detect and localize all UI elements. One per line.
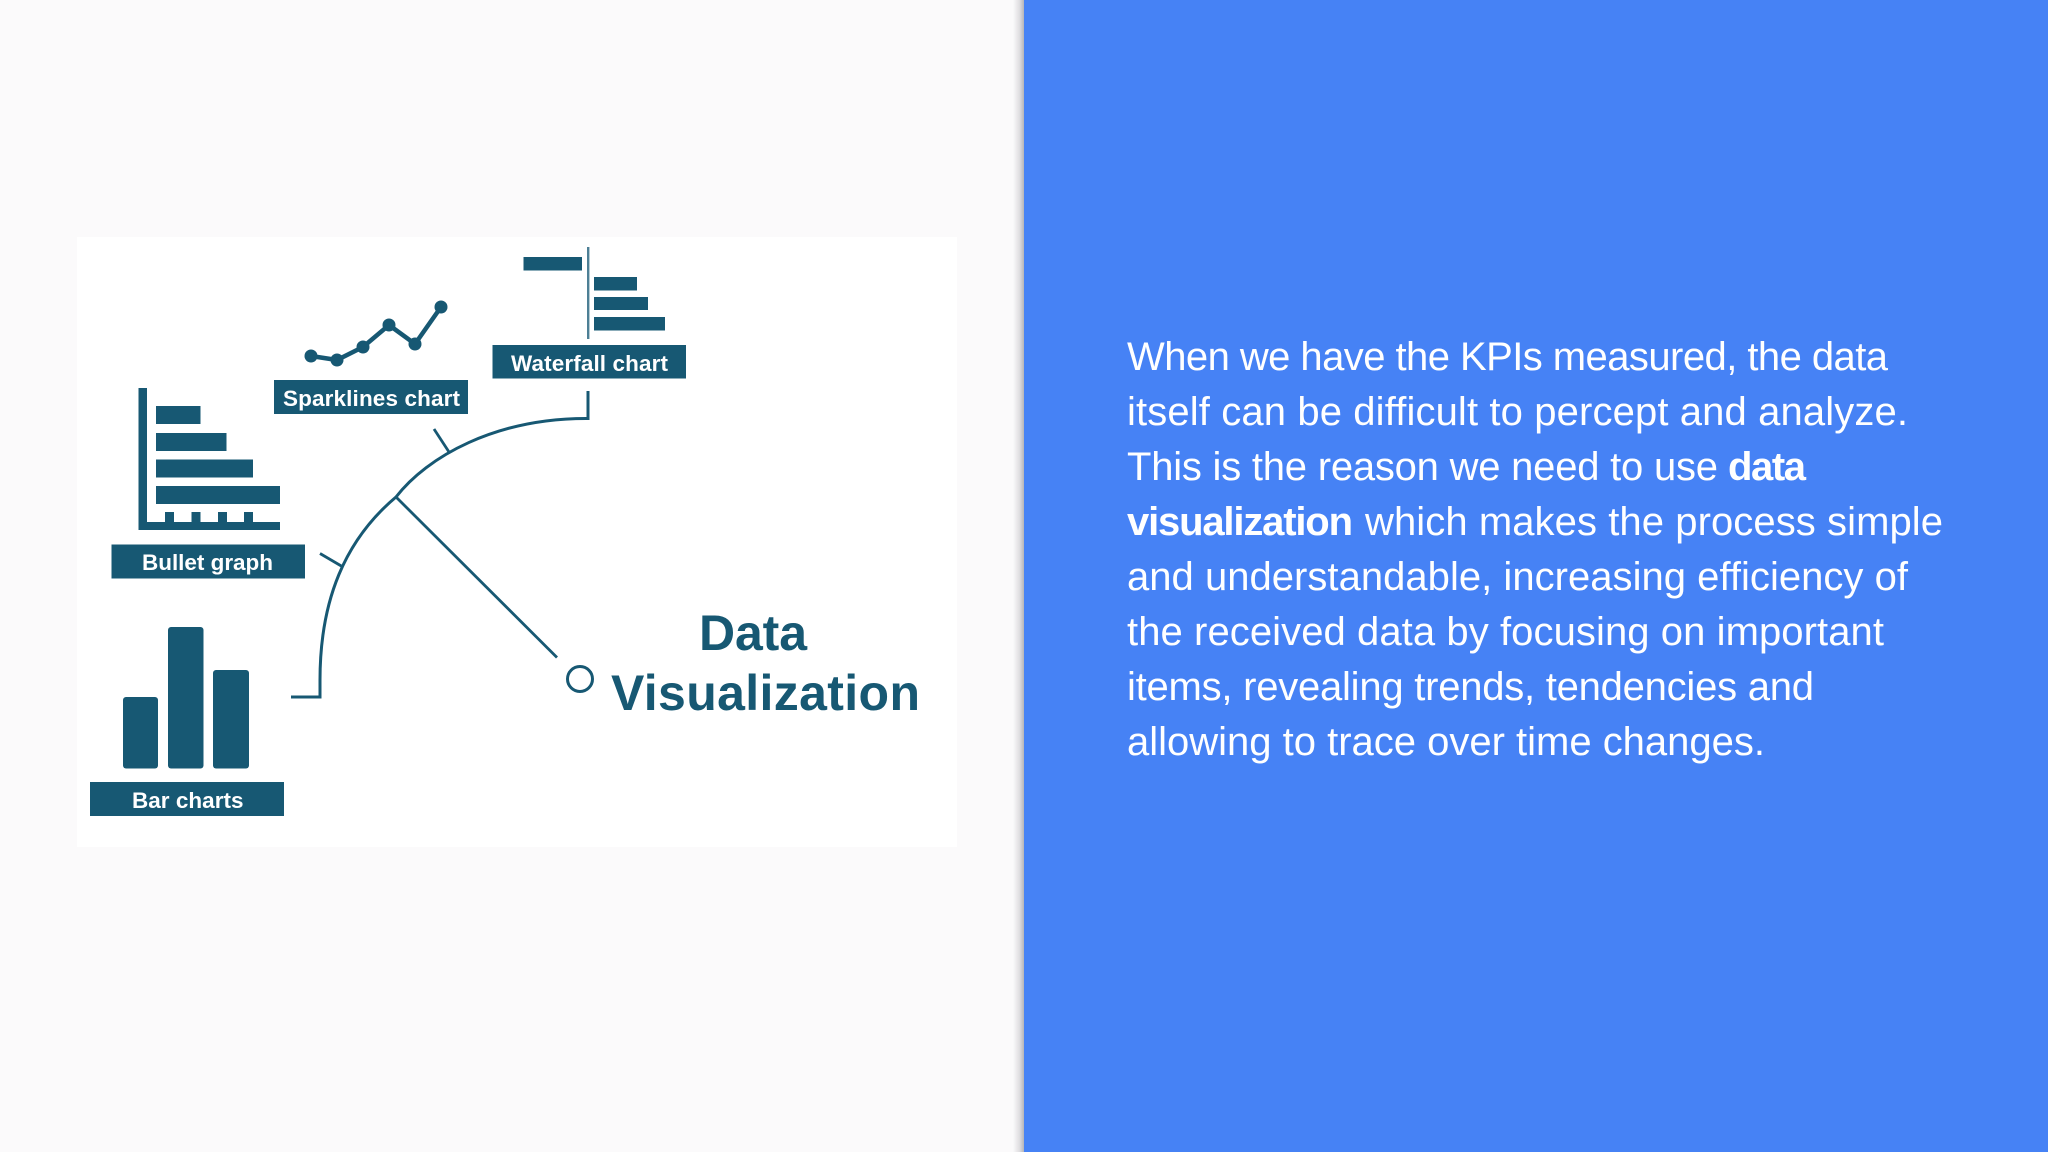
- label: bar charts: Bar charts: [132, 788, 244, 813]
- label: sparklines chart: [274, 380, 468, 414]
- text block: data visualization explanation: the received data by focusing on important: [1127, 610, 1884, 654]
- text block: data visualization explanation: [1127, 335, 1943, 764]
- panel: data visualization diagram: [77, 237, 957, 847]
- text block: data visualization explanation: allowing to trace over time changes.: [1127, 720, 1765, 764]
- text block: data visualization explanation: visualization: [1127, 500, 1353, 544]
- label: bullet graph: Bullet graph: [142, 550, 273, 575]
- label: bar charts: [90, 782, 284, 816]
- text block: data visualization explanation: and understandable, increasing efficiency of: [1127, 555, 1909, 599]
- icon: hub circle: [568, 666, 592, 692]
- label: sparklines chart: Sparklines chart: [283, 386, 460, 411]
- icon: waterfall chart: [524, 247, 665, 339]
- text block: data visualization explanation: When we have the KPIs measured, the data: [1127, 335, 1889, 379]
- label: bullet graph: [112, 544, 305, 578]
- heading: data visualization: Visualization: [611, 665, 920, 721]
- text block: data visualization explanation: This is the reason we need to use: [1127, 445, 1718, 489]
- panel: blue text panel: [1024, 0, 2048, 1152]
- icon: bullet graph: [138, 388, 280, 530]
- text block: data visualization explanation: which makes the process simple: [1364, 500, 1943, 544]
- label: waterfall chart: Waterfall chart: [511, 351, 668, 376]
- label: waterfall chart: [492, 345, 686, 378]
- heading: data visualization: [611, 605, 920, 721]
- text block: data visualization explanation: itself can be difficult to percept and analyze.: [1127, 390, 1908, 434]
- heading: data visualization: Data: [699, 605, 808, 661]
- text block: data visualization explanation: data: [1728, 445, 1807, 489]
- panel shadow: [1013, 0, 1024, 1152]
- icon: bar charts: [123, 627, 249, 768]
- text block: data visualization explanation: items, revealing trends, tendencies and: [1127, 665, 1814, 709]
- connector: arc with branch ticks: [291, 391, 588, 697]
- icon: sparkline chart: [304, 300, 448, 366]
